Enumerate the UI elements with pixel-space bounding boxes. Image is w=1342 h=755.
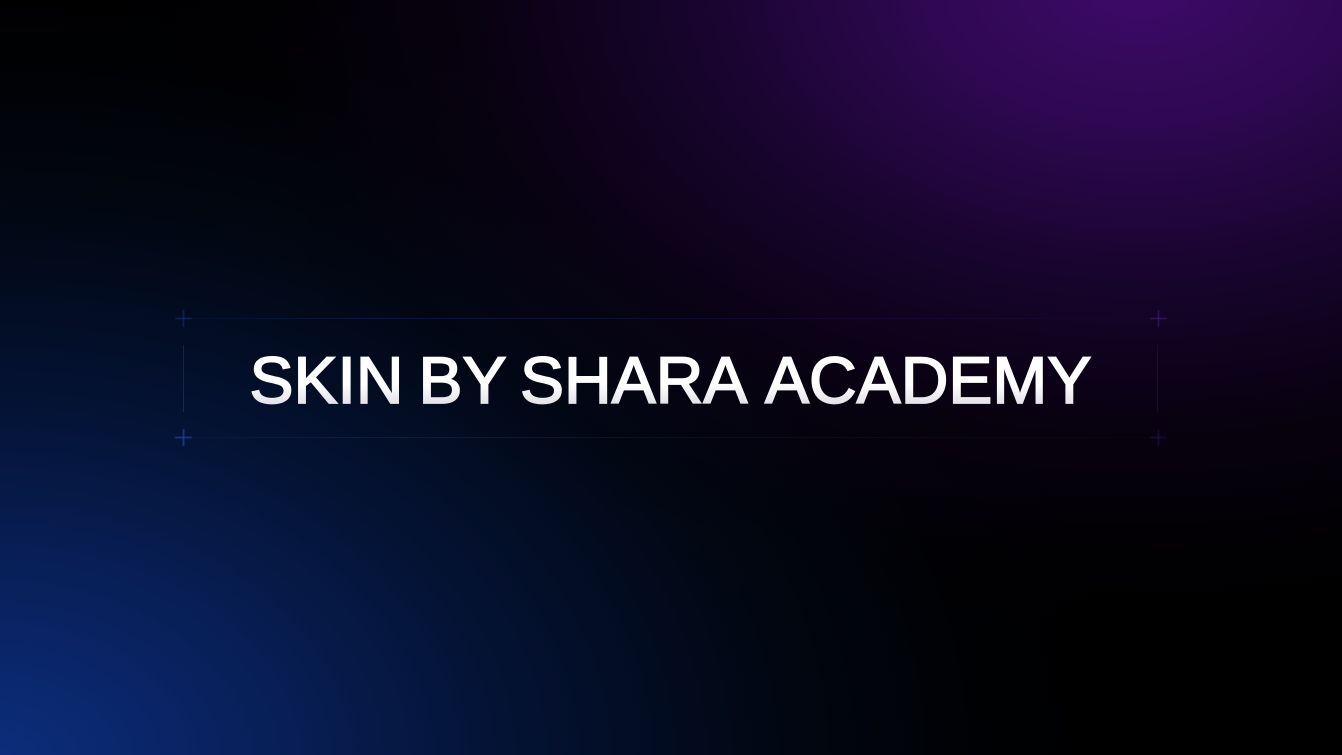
frame right line [1156, 345, 1158, 412]
corner plus top-right [1150, 310, 1167, 327]
corner plus bottom-right [1150, 429, 1167, 446]
title: BY [418, 343, 506, 417]
corner plus bottom-left [175, 429, 192, 446]
frame bottom line [193, 436, 1149, 438]
frame left line [182, 345, 184, 412]
corner plus top-left [175, 310, 192, 327]
frame top line [193, 318, 1149, 320]
title: ACADEMY [765, 343, 1091, 417]
title: SKIN [250, 343, 404, 417]
title: SHARA [520, 343, 747, 417]
